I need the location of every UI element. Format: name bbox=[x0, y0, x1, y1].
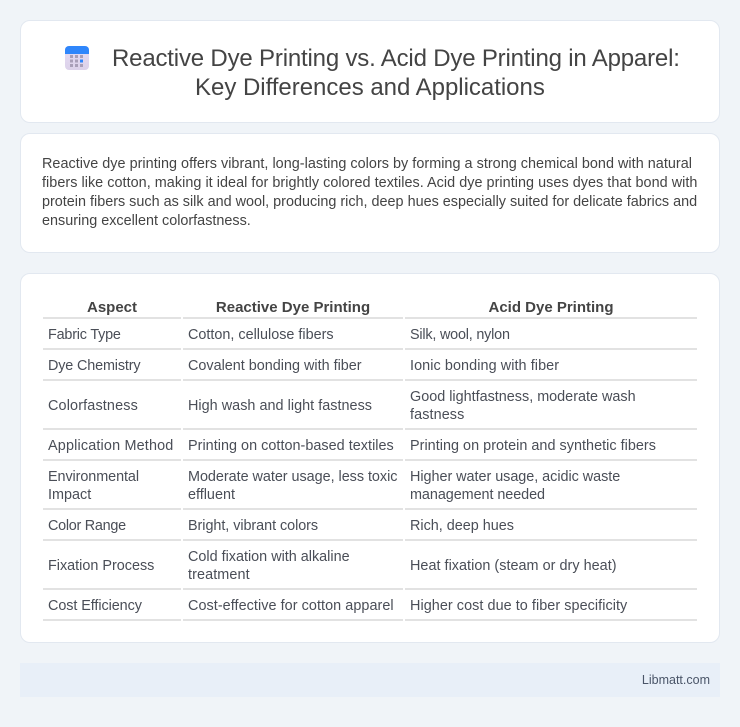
row: cost efficiency bbox=[48, 598, 628, 614]
header panel bbox=[20, 20, 720, 123]
row: colorfastness: Colorfastness bbox=[48, 398, 138, 414]
row: color range: Bright, vibrant colors bbox=[188, 518, 318, 534]
row: color range bbox=[48, 518, 514, 534]
row: cost efficiency: Cost-effective for cotton apparel bbox=[188, 598, 394, 614]
row: fixation process: Heat fixation (steam or dry heat) bbox=[410, 558, 617, 574]
row: fabric type: Silk, wool, nylon bbox=[410, 327, 510, 343]
row: cost efficiency: Cost Efficiency bbox=[48, 598, 142, 614]
row: dye chemistry bbox=[48, 358, 559, 374]
row: environmental impact: Impact bbox=[48, 487, 91, 503]
row: fabric type: Fabric Type bbox=[48, 327, 121, 343]
row: environmental impact: Higher water usage, acidic waste bbox=[410, 469, 620, 485]
intro text: Reactive dye printing offers vibrant, long-lasting colors by forming a strong chemical bond with natural bbox=[42, 156, 692, 172]
row: fixation process bbox=[48, 549, 617, 583]
row: application method bbox=[48, 438, 656, 454]
row: fabric type bbox=[48, 327, 510, 343]
row: fabric type: Cotton, cellulose fibers bbox=[188, 327, 334, 343]
icon: calendar grid bbox=[65, 46, 89, 70]
row: cost efficiency: Higher cost due to fiber specificity bbox=[410, 598, 627, 614]
row: environmental impact: management needed bbox=[410, 487, 545, 503]
row: fixation process: Cold fixation with alkaline bbox=[188, 549, 350, 565]
table bbox=[43, 299, 697, 621]
row: color range: Color Range bbox=[48, 518, 126, 534]
row: colorfastness: fastness bbox=[410, 407, 464, 423]
row: colorfastness bbox=[48, 389, 636, 423]
footer credit: Libmatt.com bbox=[642, 673, 710, 687]
table header bbox=[87, 299, 614, 316]
intro panel bbox=[20, 133, 720, 253]
row: environmental impact: effluent bbox=[188, 487, 235, 503]
row: environmental impact: Environmental bbox=[48, 469, 139, 485]
row: dye chemistry: Ionic bonding with fiber bbox=[410, 358, 559, 374]
row: color range: Rich, deep hues bbox=[410, 518, 514, 534]
row: environmental impact: Moderate water usage, less toxic bbox=[188, 469, 397, 485]
title bbox=[112, 45, 680, 101]
table header: Reactive Dye Printing bbox=[216, 299, 370, 316]
table header: Aspect bbox=[87, 299, 137, 316]
title: Reactive Dye Printing vs. Acid Dye Printing in Apparel: bbox=[112, 45, 680, 72]
table header: Acid Dye Printing bbox=[488, 299, 614, 316]
intro text: fibers like cotton, making it ideal for brightly colored textiles. Acid dye printing uses dyes that bond with bbox=[42, 175, 697, 191]
row: application method: Printing on protein and synthetic fibers bbox=[410, 438, 656, 454]
intro text: protein fibers such as silk and wool, producing rich, deep hues especially suited for delicate fabrics and bbox=[42, 194, 697, 210]
footer bar bbox=[20, 663, 720, 697]
row: application method: Application Method bbox=[48, 438, 173, 454]
title: Key Differences and Applications bbox=[195, 74, 545, 101]
row: colorfastness: Good lightfastness, moderate wash bbox=[410, 389, 636, 405]
row: fixation process: Fixation Process bbox=[48, 558, 154, 574]
intro text bbox=[42, 156, 697, 229]
row: fixation process: treatment bbox=[188, 567, 250, 583]
row: dye chemistry: Dye Chemistry bbox=[48, 358, 140, 374]
row: application method: Printing on cotton-based textiles bbox=[188, 438, 394, 454]
intro text: ensuring excellent colorfastness. bbox=[42, 213, 251, 229]
row: colorfastness: High wash and light fastness bbox=[188, 398, 372, 414]
row: environmental impact bbox=[48, 469, 620, 503]
row: dye chemistry: Covalent bonding with fiber bbox=[188, 358, 362, 374]
table panel bbox=[20, 273, 720, 643]
